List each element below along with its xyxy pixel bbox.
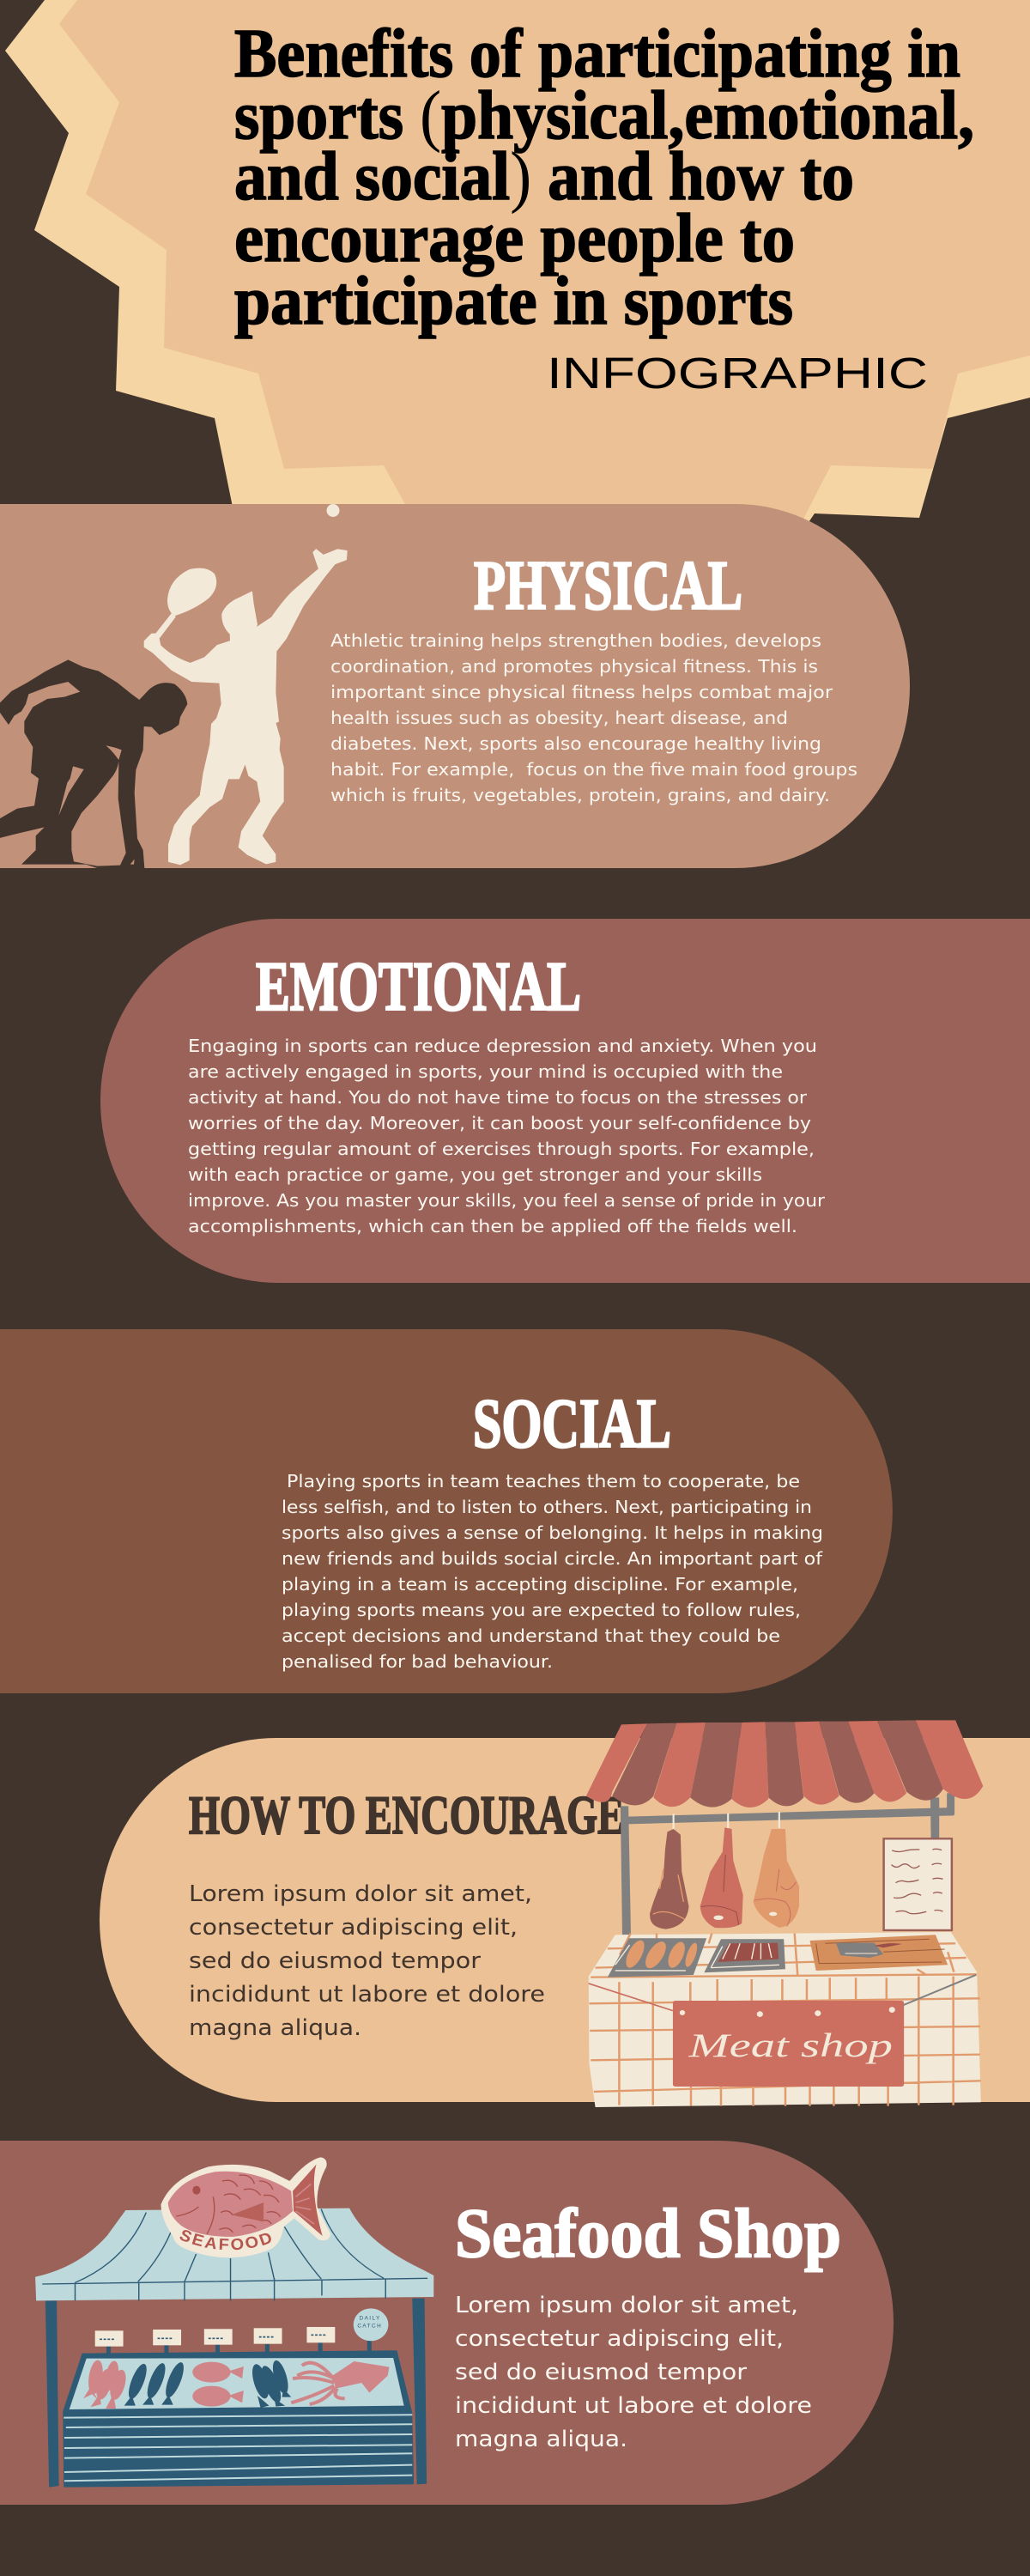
panel: how to encourage	[100, 1720, 1030, 2107]
trays	[608, 1938, 785, 1978]
text block: social: less selfish, and to listen to others. Next, participating in	[282, 1497, 812, 1517]
menu board	[884, 1838, 952, 1930]
text block: social: playing sports means you are expected to follow rules,	[282, 1600, 801, 1620]
text block: physical: coordination, and promotes physical fitness. This is	[330, 656, 818, 677]
table with tiles	[589, 1932, 981, 2107]
text block: emotional: improve. As you master your skills, you feel a sense of pride in your	[188, 1190, 826, 1211]
icon: meat shop stall	[586, 1720, 983, 2107]
text block: emotional: getting regular amount of exercises through sports. For example,	[188, 1139, 815, 1159]
text block: seafood shop: sed do eiusmod tempor	[455, 2360, 747, 2385]
panel: seafood shop	[0, 2141, 894, 2505]
text block: seafood shop: magna aliqua.	[455, 2427, 627, 2452]
text block: physical: diabetes. Next, sports also encourage healthy living	[330, 733, 821, 754]
text block: social: accept decisions and understand that they could be	[282, 1625, 780, 1646]
pink round fish	[192, 2362, 244, 2407]
text block: how to encourage: consectetur adipiscing elit,	[189, 1915, 518, 1941]
text block: physical: habit. For example, focus on the five main food groups	[330, 759, 857, 780]
text block: how to encourage: sed do eiusmod tempor	[189, 1948, 481, 1974]
text block: social: penalised for bad behaviour.	[282, 1651, 553, 1672]
text block: emotional: with each practice or game, you get stronger and your skills	[188, 1164, 762, 1185]
meat shop sign	[673, 2001, 904, 2087]
daily catch badge: DAILY	[360, 2315, 381, 2321]
text block: emotional	[188, 1036, 826, 1236]
fish sign	[161, 2157, 330, 2258]
hanging hams	[650, 1827, 799, 1929]
text block: physical: health issues such as obesity, heart disease, and	[330, 708, 788, 728]
awning	[586, 1720, 983, 1807]
subtitle: infographic: INFOGRAPHIC	[547, 349, 928, 398]
text block: physical	[330, 630, 857, 805]
text block: social: playing in a team is accepting discipline. For example,	[282, 1574, 798, 1595]
text block: how to encourage: incididunt ut labore et dolore	[189, 1982, 545, 2008]
text block: physical: important since physical fitness helps combat major	[330, 682, 833, 702]
fish sign: SEAFOOD	[180, 2230, 271, 2250]
pink slender fish	[83, 2359, 129, 2409]
price tags	[95, 2327, 372, 2354]
text block: social	[282, 1471, 823, 1672]
heading: emotional: EMOTIONAL	[256, 947, 581, 1025]
stall posts	[45, 2299, 427, 2488]
panel: physical	[0, 504, 910, 868]
text block: emotional: are actively engaged in sports, your mind is occupied with the	[188, 1061, 783, 1082]
text block: how to encourage: magna aliqua.	[189, 2015, 361, 2041]
text block: physical: which is fruits, vegetables, protein, grains, and dairy.	[330, 785, 830, 805]
title: Benefits of participating in	[234, 16, 960, 92]
panel: emotional	[100, 919, 1030, 1283]
text block: how to encourage: Lorem ipsum dolor sit amet,	[189, 1881, 532, 1907]
text block: how to encourage	[189, 1881, 545, 2041]
text block: seafood shop: Lorem ipsum dolor sit amet,	[455, 2293, 798, 2318]
header burst shape	[5, 0, 1030, 532]
display case	[63, 2350, 414, 2488]
text block: emotional: accomplishments, which can then be applied off the fields well.	[188, 1216, 797, 1236]
daily catch badge	[354, 2308, 388, 2341]
text block: emotional: worries of the day. Moreover, it can boost your self-confidence by	[188, 1113, 811, 1133]
daily catch badge: CATCH	[357, 2324, 382, 2330]
roof	[35, 2208, 433, 2300]
title: encourage people to	[234, 201, 795, 276]
squid	[291, 2361, 390, 2404]
text block: seafood shop: consectetur adipiscing elit,	[455, 2326, 784, 2352]
icon: seafood stall	[35, 2157, 434, 2488]
panel: social	[0, 1329, 893, 1693]
cutting board and cleaver	[810, 1935, 948, 1971]
icon: tennis player silhouette	[144, 550, 347, 865]
heading: social: SOCIAL	[473, 1384, 671, 1462]
sign strings	[589, 1984, 673, 2011]
title: sports (physical,emotional,	[234, 78, 974, 154]
heading: how to encourage: HOW TO ENCOURAGE	[189, 1785, 624, 1845]
title: participate in sports	[234, 264, 793, 339]
stall frame	[621, 1793, 954, 1935]
title: and social) and how to	[234, 139, 854, 215]
text block: emotional: Engaging in sports can reduce depression and anxiety. When you	[188, 1036, 817, 1056]
navy slender fish	[124, 2359, 291, 2408]
text block: social: new friends and builds social circle. An important part of	[282, 1548, 823, 1569]
meat shop sign: Meat shop	[688, 2026, 893, 2064]
icon: tennis ball	[326, 504, 340, 517]
text block: social: sports also gives a sense of belonging. It helps in making	[282, 1522, 823, 1543]
hooks	[674, 1812, 779, 1830]
text block: emotional: activity at hand. You do not have time to focus on the stresses or	[188, 1087, 808, 1108]
text block: social: Playing sports in team teaches them to cooperate, be	[287, 1471, 800, 1492]
heading: physical: PHYSICAL	[474, 546, 742, 624]
title	[234, 16, 974, 339]
icon: sprinter silhouette	[0, 659, 187, 868]
heading: seafood shop: Seafood Shop	[455, 2194, 841, 2272]
text block: physical: Athletic training helps strengthen bodies, develops	[330, 630, 821, 651]
text block: seafood shop: incididunt ut labore et dolore	[455, 2393, 812, 2419]
text block: seafood shop	[455, 2293, 812, 2452]
